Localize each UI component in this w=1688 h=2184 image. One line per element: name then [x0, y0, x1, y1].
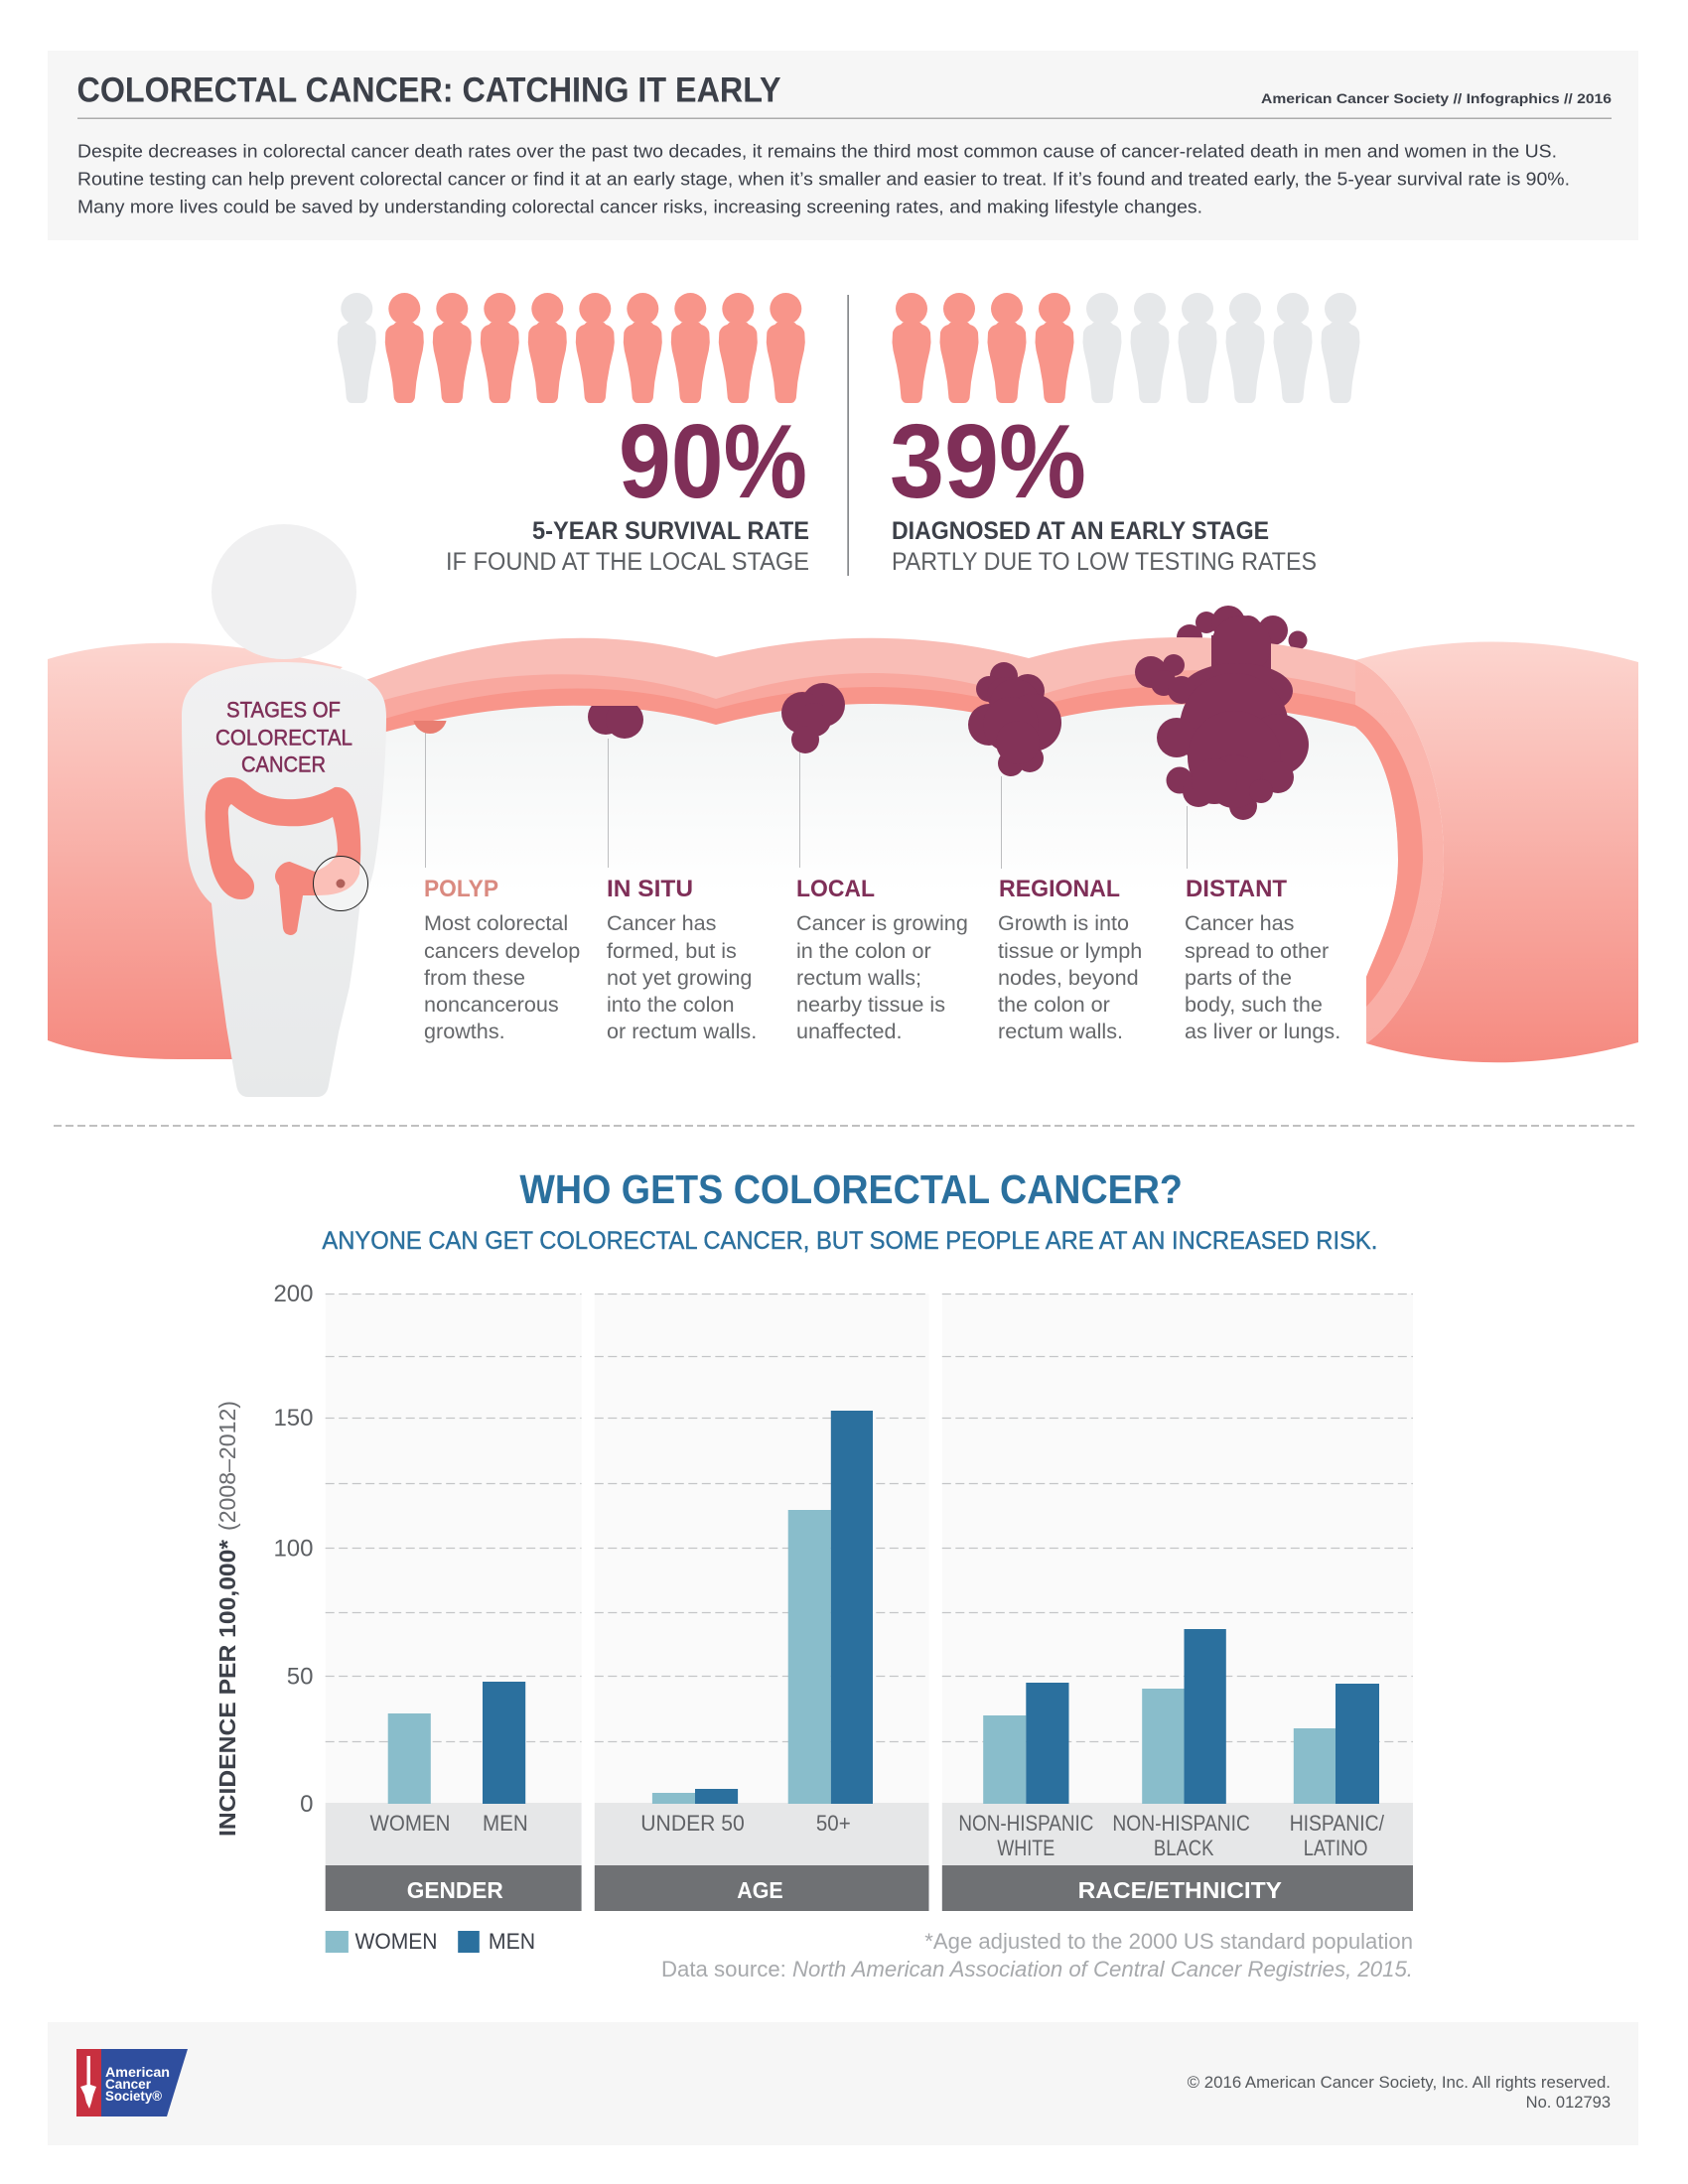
- footnotes: *Age adjusted to the 2000 US standard population: [924, 1929, 1413, 1954]
- stage: regional: rectum walls.: [998, 1019, 1123, 1043]
- category labels: WOMEN: [369, 1811, 451, 1836]
- stage: distant: spread to other: [1185, 938, 1329, 963]
- stage: local: unaffected.: [796, 1019, 902, 1043]
- stage: polyp: POLYP: [424, 876, 498, 902]
- copyright: [1188, 2074, 1611, 2112]
- stage: polyp: Most colorectal: [424, 910, 568, 935]
- stat: 39 percent early diagnosis: [890, 403, 1317, 576]
- legend: [326, 1929, 535, 1954]
- category labels: NON-HISPANIC: [958, 1811, 1093, 1836]
- tumor: local: [781, 683, 845, 753]
- stage: polyp: from these: [424, 965, 525, 990]
- figure label: [215, 697, 352, 776]
- stat: 90 percent survival: [446, 403, 809, 576]
- logo: American Cancer Society: [76, 2049, 188, 2116]
- y axis labels: 200: [273, 1281, 314, 1307]
- panel: footer: [48, 2022, 1638, 2145]
- tumor: distant, top lobes behind wall: [1177, 606, 1307, 655]
- stage: in situ: formed, but is: [607, 938, 737, 963]
- stage: regional: nodes, beyond: [998, 965, 1139, 990]
- y axis labels: 150: [273, 1405, 314, 1432]
- category labels: LATINO: [1304, 1836, 1368, 1860]
- y axis labels: [273, 1281, 314, 1818]
- stage: polyp: cancers develop: [424, 938, 580, 963]
- stage: local: LOCAL: [796, 876, 875, 902]
- source line: American Cancer Society // Infographics // 2016: [1261, 91, 1613, 106]
- stage: in situ: [607, 876, 757, 1043]
- tumor: regional: [968, 662, 1061, 776]
- bars: gender: [388, 1682, 525, 1804]
- stage: regional: REGIONAL: [999, 876, 1120, 902]
- stage: distant: Cancer has: [1185, 910, 1295, 935]
- stage: local: Cancer is growing: [796, 910, 968, 935]
- footnotes: [661, 1929, 1413, 1981]
- chart panels: [326, 1294, 1413, 1865]
- logo: American Cancer Society: American: [105, 2064, 170, 2080]
- stage: distant: DISTANT: [1186, 876, 1287, 902]
- intro paragraph: Despite decreases in colorectal cancer death rates over the past two decades, it remains the third most common cause of cancer-related death in men and women in the US.: [77, 141, 1557, 162]
- subheading: ANYONE CAN GET COLORECTAL CANCER, BUT SOME PEOPLE ARE AT AN INCREASED RISK.: [322, 1227, 1377, 1255]
- footnotes: Data source: North American Association of Central Cancer Registries, 2015.: [661, 1957, 1413, 1981]
- mini colon: [206, 777, 360, 935]
- group headers: [326, 1865, 1413, 1911]
- y axis title: (2008–2012): [214, 1401, 240, 1531]
- legend: WOMEN: [355, 1929, 437, 1954]
- stage: distant: body, such the: [1185, 992, 1323, 1017]
- figure label: COLORECTAL: [215, 725, 352, 751]
- stat: 90 percent survival: IF FOUND AT THE LOCAL STAGE: [446, 548, 809, 576]
- logo: American Cancer Society: Society®: [105, 2088, 163, 2104]
- tumor: in situ: [588, 706, 643, 739]
- group headers: GENDER: [407, 1877, 503, 1903]
- stage: local: [796, 876, 968, 1043]
- intro paragraph: Routine testing can help prevent colorectal cancer or find it at an early stage, when it’s smaller and easier to treat. If it’s found and treated early, the 5-year survival rate is 90%.: [77, 169, 1570, 190]
- logo: American Cancer Society: Cancer: [105, 2076, 152, 2092]
- stage: in situ: into the colon: [607, 992, 734, 1017]
- pictogram: 39 percent of people: [892, 293, 1360, 403]
- bars: age: [652, 1411, 873, 1804]
- y axis title: [214, 1401, 240, 1837]
- stage: distant: parts of the: [1185, 965, 1292, 990]
- bar chart: incidence per 100,000: [214, 1281, 1413, 1911]
- stage: distant: [1185, 876, 1340, 1043]
- illustration: colon cross-section: [48, 606, 1638, 1062]
- title: COLORECTAL CANCER: CATCHING IT EARLY: [77, 71, 780, 109]
- y axis labels: 100: [273, 1535, 314, 1563]
- stage: regional: Growth is into: [998, 910, 1129, 935]
- stage: in situ: or rectum walls.: [607, 1019, 757, 1043]
- panel: header intro: [48, 51, 1638, 240]
- category labels: UNDER 50: [640, 1811, 745, 1836]
- figure: human silhouette: [182, 524, 386, 1097]
- stem lines: [425, 733, 1188, 869]
- category labels: [369, 1811, 1385, 1860]
- copyright: No. 012793: [1526, 2094, 1611, 2112]
- stage: polyp: noncancerous: [424, 992, 559, 1017]
- y axis labels: 0: [300, 1791, 314, 1818]
- legend: MEN: [489, 1929, 535, 1954]
- copyright: © 2016 American Cancer Society, Inc. All rights reserved.: [1188, 2074, 1611, 2092]
- stat: 90 percent survival: 5-YEAR SURVIVAL RATE: [532, 517, 809, 545]
- stage: local: rectum walls;: [796, 965, 921, 990]
- group headers: AGE: [737, 1877, 783, 1903]
- stage: in situ: Cancer has: [607, 910, 717, 935]
- stat: 39 percent early diagnosis: PARTLY DUE TO LOW TESTING RATES: [892, 548, 1317, 576]
- stage: regional: tissue or lymph: [998, 938, 1142, 963]
- intro paragraph: [77, 141, 1570, 217]
- y axis labels: 50: [287, 1664, 314, 1690]
- stat: 39 percent early diagnosis: 39%: [890, 403, 1086, 520]
- category labels: WHITE: [997, 1836, 1055, 1860]
- y axis title: INCIDENCE PER 100,000*: [214, 1540, 240, 1837]
- stage: distant: as liver or lungs.: [1185, 1019, 1340, 1043]
- category labels: MEN: [483, 1811, 528, 1836]
- bars: race and ethnicity: [983, 1629, 1379, 1804]
- stage: in situ: not yet growing: [607, 965, 752, 990]
- pictogram: 90 percent of people: [338, 293, 805, 403]
- stage: regional: [998, 876, 1142, 1043]
- figure label: STAGES OF: [226, 697, 341, 723]
- stage: polyp: [424, 876, 580, 1043]
- stage: in situ: IN SITU: [607, 876, 693, 902]
- group headers: RACE/ETHNICITY: [1078, 1877, 1282, 1903]
- category labels: HISPANIC/: [1290, 1811, 1385, 1836]
- stat: 39 percent early diagnosis: DIAGNOSED AT AN EARLY STAGE: [892, 517, 1269, 545]
- figure label: CANCER: [241, 752, 326, 776]
- stage: polyp: growths.: [424, 1019, 505, 1043]
- category labels: NON-HISPANIC: [1112, 1811, 1250, 1836]
- stage: regional: the colon or: [998, 992, 1110, 1017]
- stage: local: in the colon or: [796, 938, 931, 963]
- tumor: distant: [1135, 615, 1309, 820]
- stat: 90 percent survival: 90%: [619, 403, 807, 520]
- tumor: polyp: [413, 721, 447, 734]
- stage: local: nearby tissue is: [796, 992, 945, 1017]
- category labels: BLACK: [1154, 1836, 1214, 1860]
- category labels: 50+: [816, 1811, 851, 1836]
- intro paragraph: Many more lives could be saved by understanding colorectal cancer risks, increasing screening rates, and making lifestyle changes.: [77, 197, 1202, 217]
- heading: who gets colorectal cancer: WHO GETS COLORECTAL CANCER?: [519, 1166, 1183, 1212]
- magnifier circle: [313, 856, 368, 911]
